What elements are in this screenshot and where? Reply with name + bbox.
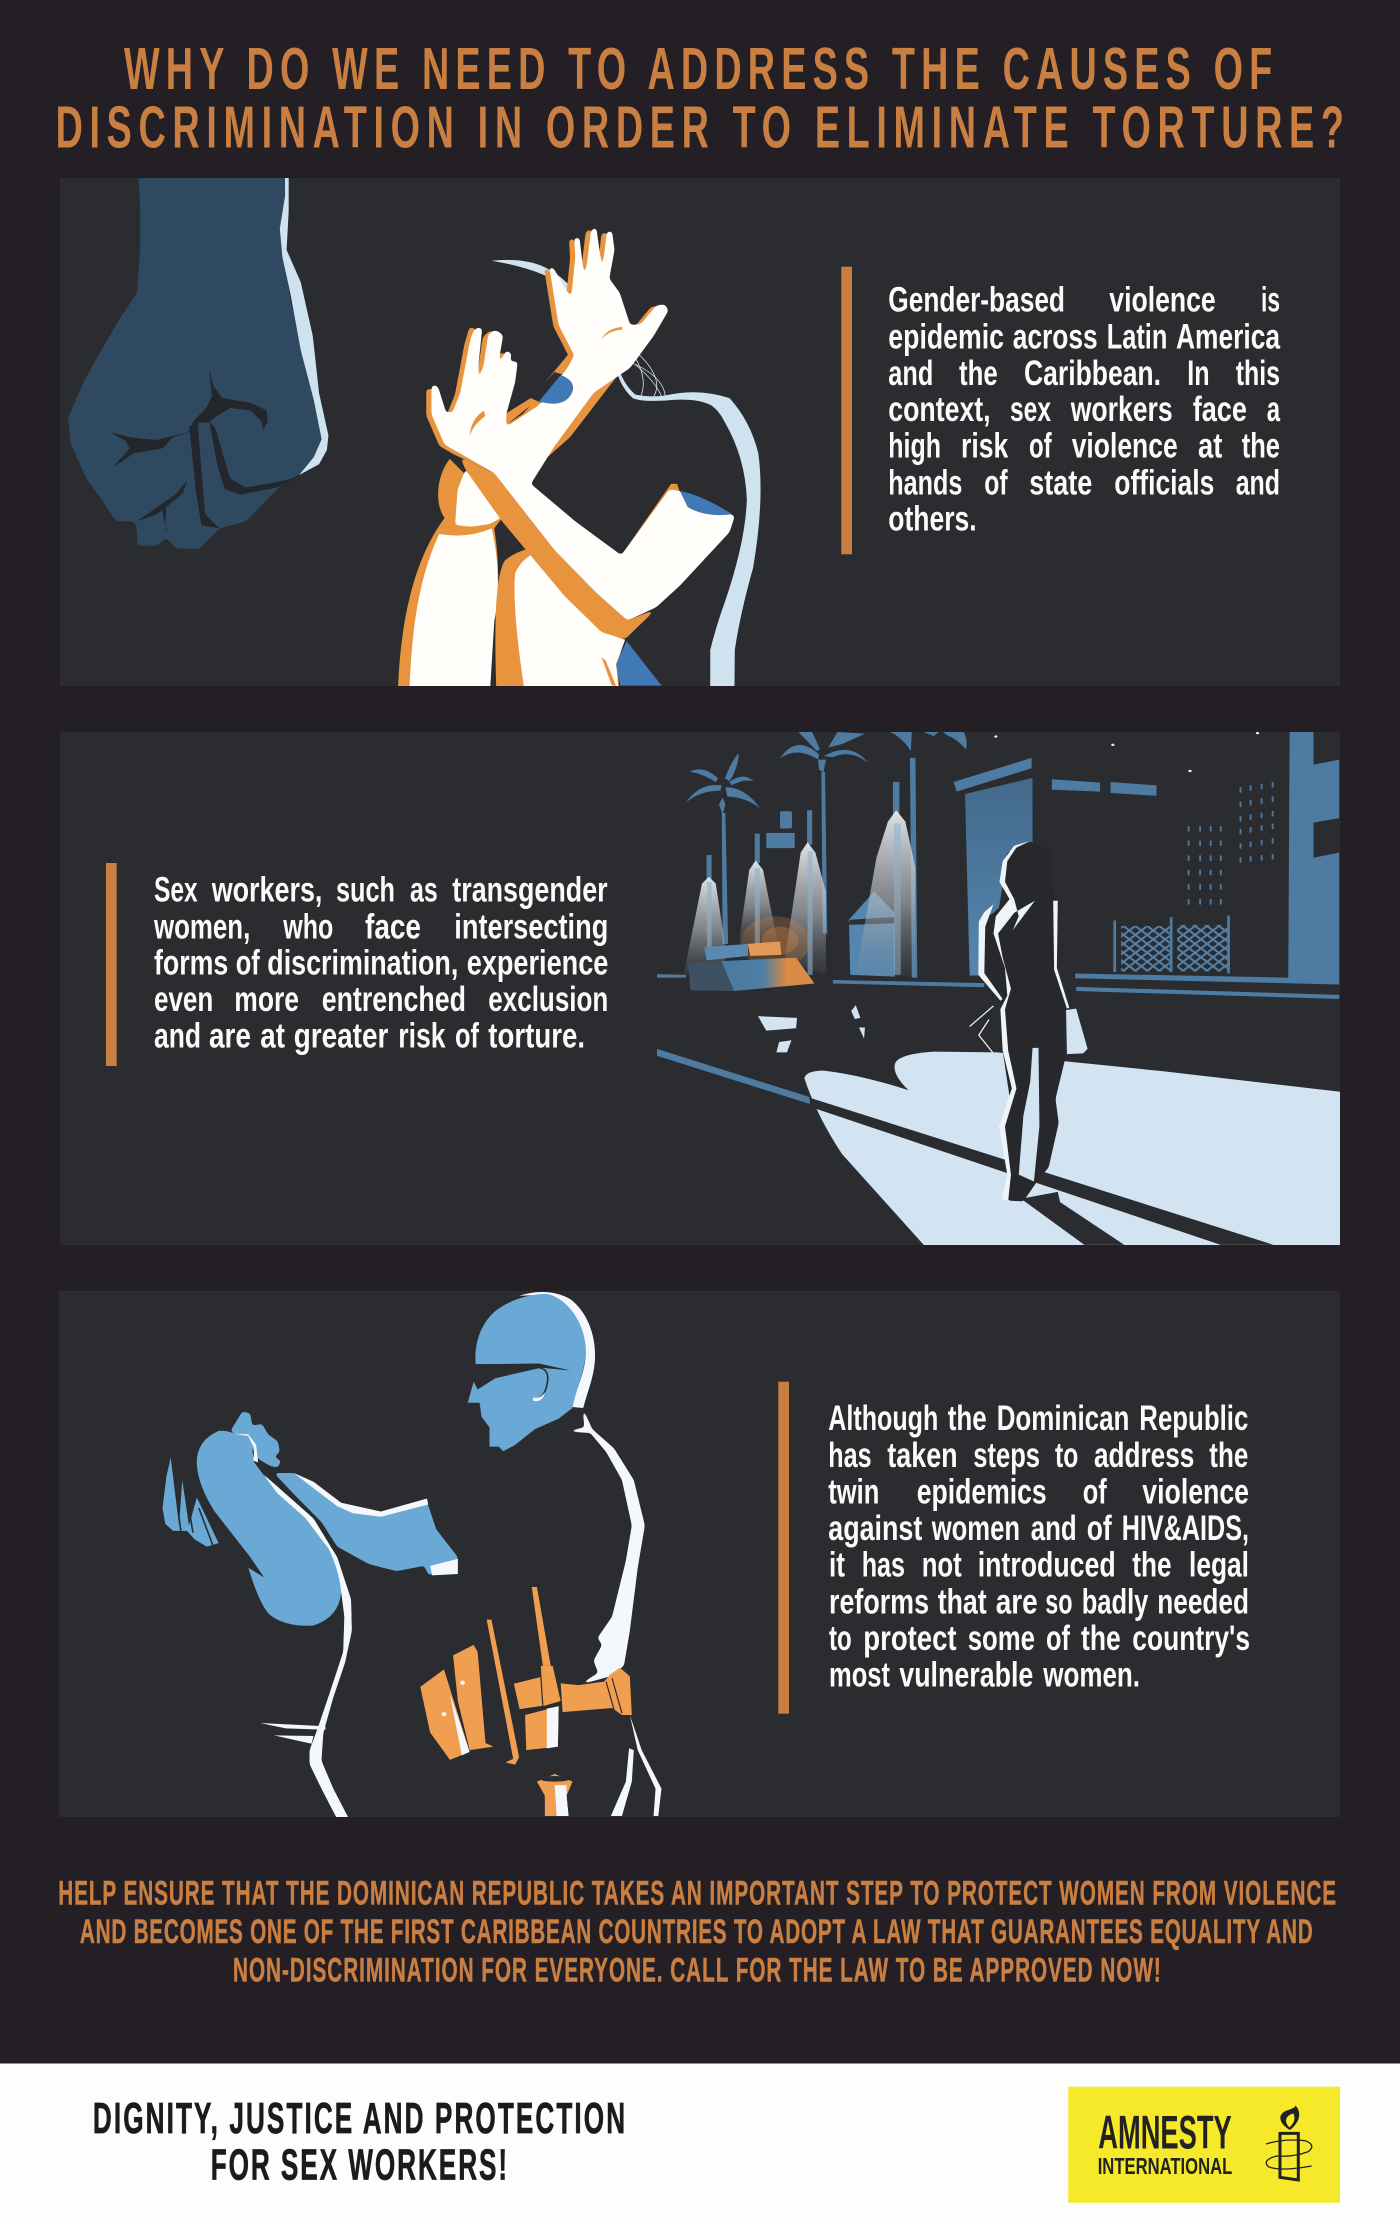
text block: gender-based violence: violence — [1072, 427, 1178, 466]
text block: gender-based violence: across — [1013, 317, 1098, 356]
text block: intersecting discrimination: discrimination, — [267, 943, 458, 982]
text block: gender-based violence: risk — [961, 427, 1009, 466]
text block: legal reform: HIV&AIDS, — [1122, 1509, 1249, 1548]
text block: legal reform: to — [1055, 1436, 1078, 1475]
text block: gender-based violence: this — [1236, 354, 1280, 393]
amnesty international logo: INTERNATIONAL — [1098, 2153, 1232, 2179]
text block: gender-based violence — [888, 281, 1280, 538]
text block: legal reform: are — [996, 1582, 1038, 1621]
text block: legal reform: and — [1031, 1509, 1077, 1548]
utility belt — [420, 1587, 632, 1816]
title: DISCRIMINATION IN ORDER TO ELIMINATE TORTURE? — [56, 95, 1344, 160]
building and awning — [954, 732, 1339, 982]
text block: gender-based violence: epidemic — [888, 317, 1004, 356]
text block: legal reform: introduced — [978, 1546, 1116, 1585]
officer back outline — [573, 1413, 645, 1682]
text block: intersecting discrimination: and — [154, 1017, 201, 1056]
hair strands — [634, 354, 666, 396]
call to action: AND BECOMES ONE OF THE FIRST CARIBBEAN COUNTRIES TO ADOPT A LAW THAT GUARANTEES EQUALITY AND — [80, 1913, 1313, 1950]
text block: gender-based violence: America — [1176, 317, 1280, 356]
text block: intersecting discrimination: such — [336, 871, 395, 910]
text block: legal reform — [828, 1399, 1250, 1695]
text block: legal reform: Republic — [1139, 1399, 1248, 1438]
police car — [688, 916, 865, 1052]
text block: gender-based violence: Latin — [1107, 317, 1167, 356]
text block: intersecting discrimination: torture. — [488, 1017, 585, 1056]
text block: gender-based violence: high — [888, 427, 941, 466]
footer band — [0, 2064, 1400, 2224]
text block: legal reform: so — [1045, 1582, 1073, 1621]
text block: legal reform: it — [829, 1546, 845, 1585]
text block: intersecting discrimination: Sex — [154, 871, 198, 910]
text block: gender-based violence: violence — [1109, 281, 1216, 320]
text block: legal reform: legal — [1189, 1546, 1249, 1585]
text block: legal reform: taken — [887, 1436, 958, 1475]
text block: legal reform: country's — [1132, 1619, 1250, 1658]
text block: gender-based violence: Gender-based — [888, 281, 1065, 320]
text block: legal reform: has — [862, 1546, 905, 1585]
text block: gender-based violence: workers — [1070, 390, 1173, 429]
text block: intersecting discrimination: entrenched — [322, 980, 466, 1019]
text block: legal reform: epidemics — [917, 1472, 1047, 1511]
text block: intersecting discrimination: more — [234, 980, 299, 1019]
icon: long hair outline — [492, 260, 761, 707]
text block: intersecting discrimination: at — [260, 1017, 285, 1056]
text block: legal reform: vulnerable — [899, 1656, 1033, 1695]
text block: gender-based violence: Caribbean. — [1024, 354, 1161, 393]
text block: gender-based violence: context, — [888, 390, 991, 429]
orange accent bar — [778, 1382, 789, 1714]
text block: legal reform: to — [829, 1619, 852, 1658]
lower left arm — [398, 458, 501, 686]
text block: gender-based violence: others. — [888, 499, 977, 538]
text block: gender-based violence: the — [959, 354, 998, 393]
text block: intersecting discrimination: who — [283, 907, 333, 946]
title: WHY DO WE NEED TO ADDRESS THE CAUSES OF — [124, 37, 1272, 102]
text block: intersecting discrimination: risk — [398, 1017, 446, 1056]
text block: intersecting discrimination: of — [236, 943, 260, 982]
text block: legal reform: that — [938, 1582, 987, 1621]
windows — [1188, 782, 1274, 905]
icon: candle in barbed wire — [1266, 2105, 1312, 2180]
officer legs outline — [611, 1715, 661, 1816]
text block: intersecting discrimination: women, — [153, 907, 250, 946]
text block: legal reform: Dominican — [997, 1399, 1129, 1438]
text block: gender-based violence: In — [1187, 354, 1210, 393]
text block: legal reform: of — [1087, 1509, 1112, 1548]
text block: legal reform: twin — [828, 1472, 879, 1511]
footer slogan — [93, 2093, 625, 2189]
text block: legal reform: of — [1046, 1619, 1070, 1658]
text block: legal reform: women. — [1043, 1656, 1140, 1695]
text block: intersecting discrimination: are — [209, 1017, 251, 1056]
text block: legal reform: the — [948, 1399, 987, 1438]
house and lit cone — [848, 810, 915, 977]
text block: intersecting discrimination: even — [154, 980, 213, 1019]
text block: legal reform: against — [828, 1509, 923, 1548]
pool of light — [804, 1052, 1340, 1245]
text block: intersecting discrimination: of — [455, 1017, 479, 1056]
panel: intersecting discrimination — [60, 732, 1365, 1271]
call to action: HELP ENSURE THAT THE DOMINICAN REPUBLIC TAKES AN IMPORTANT STEP TO PROTECT WOMEN FROM VIOLENCE — [58, 1874, 1336, 1912]
text block: gender-based violence: state — [1029, 463, 1092, 502]
text block: legal reform: violence — [1142, 1472, 1249, 1511]
text block: intersecting discrimination: greater — [294, 1017, 389, 1056]
text block: legal reform: protect — [863, 1619, 957, 1658]
text block: gender-based violence: officials — [1114, 463, 1214, 502]
text block: intersecting discrimination: face — [365, 907, 421, 946]
text block: gender-based violence: hands — [888, 463, 962, 502]
footer slogan: DIGNITY, JUSTICE AND PROTECTION — [93, 2093, 625, 2143]
text block: legal reform: some — [968, 1619, 1035, 1658]
panel: legal reform — [59, 1291, 1340, 1834]
officer head — [468, 1292, 595, 1451]
orange accent bar — [106, 863, 117, 1066]
title — [56, 37, 1344, 160]
text block: legal reform: badly — [1082, 1582, 1149, 1621]
text block: gender-based violence: and — [1236, 463, 1280, 502]
stars — [994, 732, 1259, 772]
call to action — [58, 1874, 1336, 1989]
text block: gender-based violence: at — [1198, 427, 1223, 466]
woman — [162, 1412, 458, 1834]
torso — [495, 550, 662, 686]
illustration: police officer restraining woman — [162, 1292, 661, 1834]
text block: legal reform: address — [1094, 1436, 1194, 1475]
text block: gender-based violence: is — [1261, 281, 1280, 320]
text block: intersecting discrimination: experience — [467, 943, 608, 982]
text block: legal reform: has — [828, 1436, 872, 1475]
text block: legal reform: needed — [1157, 1582, 1249, 1621]
text block: legal reform: most — [829, 1656, 890, 1695]
crossed arms and hands — [426, 227, 735, 639]
illustration: fist and raised hands — [68, 157, 761, 707]
text block: legal reform: the — [1081, 1619, 1121, 1658]
street lamps — [684, 782, 899, 975]
footer slogan: FOR SEX WORKERS! — [211, 2139, 507, 2189]
figure of woman — [970, 841, 1088, 1201]
text block: intersecting discrimination — [153, 871, 608, 1056]
text block: intersecting discrimination: exclusion — [488, 980, 608, 1019]
text block: legal reform: Although — [828, 1399, 938, 1438]
orange accent bar — [841, 267, 852, 554]
text block: intersecting discrimination: transgender — [452, 871, 608, 910]
text block: legal reform: women — [931, 1509, 1020, 1548]
icon: fist — [68, 157, 328, 549]
amnesty international logo — [1068, 2087, 1340, 2203]
bruise marks — [531, 372, 735, 515]
text block: legal reform: the — [1132, 1546, 1172, 1585]
call to action: NON-DISCRIMINATION FOR EVERYONE. CALL FOR THE LAW TO BE APPROVED NOW! — [233, 1952, 1161, 1989]
illustration: street at night — [657, 732, 1365, 1271]
text block: intersecting discrimination: forms — [154, 943, 228, 982]
amnesty international logo: AMNESTY — [1098, 2105, 1232, 2158]
text block: gender-based violence: of — [1029, 427, 1052, 466]
text block: legal reform: of — [1083, 1472, 1107, 1511]
text block: intersecting discrimination: intersecting — [454, 907, 608, 946]
text block: gender-based violence: and — [888, 354, 933, 393]
text block: gender-based violence: sex — [1010, 390, 1051, 429]
ground lines — [657, 973, 1339, 1104]
palm trees — [686, 732, 967, 978]
text block: legal reform: reforms — [829, 1582, 929, 1621]
text block: gender-based violence: of — [984, 463, 1008, 502]
text block: gender-based violence: face — [1193, 390, 1247, 429]
fence — [1113, 916, 1230, 973]
text block: legal reform: steps — [973, 1436, 1040, 1475]
text block: gender-based violence: a — [1267, 390, 1280, 429]
text block: intersecting discrimination: workers, — [211, 871, 322, 910]
text block: legal reform: the — [1209, 1436, 1248, 1475]
text block: intersecting discrimination: as — [410, 871, 438, 910]
text block: legal reform: not — [922, 1546, 962, 1585]
small signs — [766, 811, 795, 848]
panel: gender-based violence — [60, 157, 1340, 707]
text block: gender-based violence: the — [1242, 427, 1280, 466]
